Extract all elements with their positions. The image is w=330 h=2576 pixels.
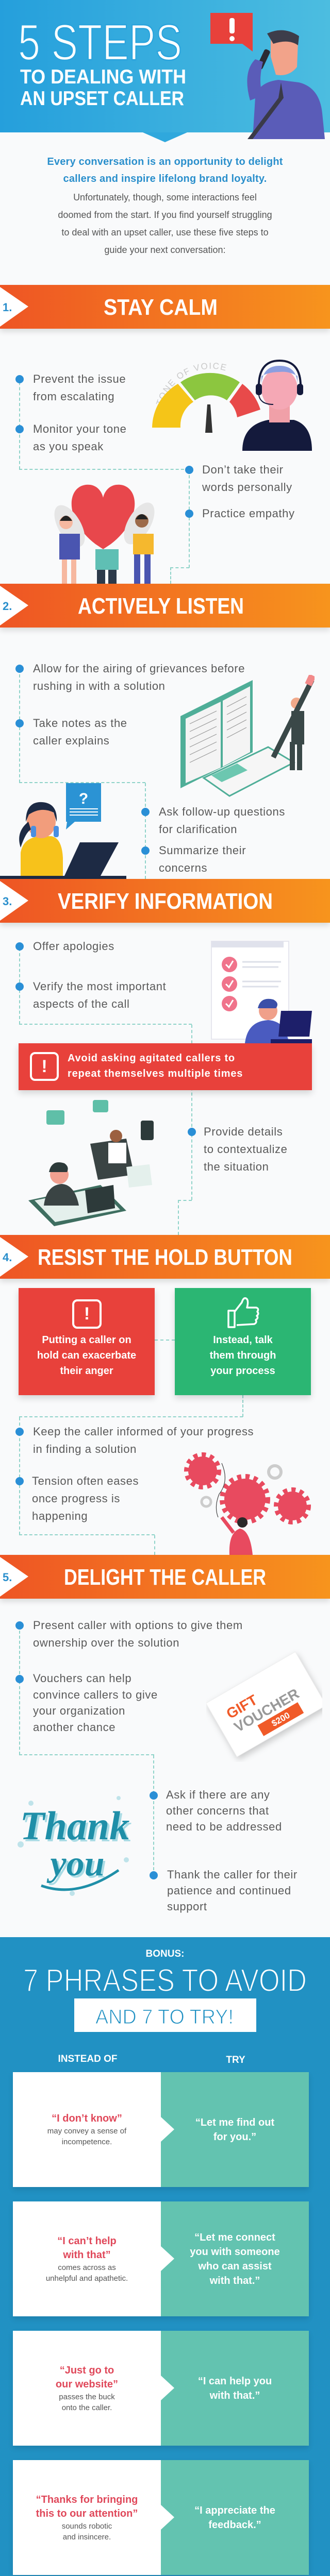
card 4: “Thanks for bringing <box>36 2494 138 2505</box>
card 4: this to our attention” <box>36 2508 138 2519</box>
card 1 <box>13 2072 309 2187</box>
bonus heading <box>23 1948 307 2032</box>
step bar 5: delight the caller <box>0 1555 330 1599</box>
step 2 bullets <box>15 662 285 879</box>
step bar 3: verify information <box>0 879 330 923</box>
icon: thank you lettering <box>18 1796 131 1896</box>
panel: bonus phrases: TRY <box>226 2055 245 2065</box>
icon: notebook with writer <box>180 675 315 797</box>
step bar 3: verify information: 3. <box>3 895 12 908</box>
step 3 bullets <box>15 940 287 1235</box>
bullet: thank the caller: support <box>167 1900 207 1913</box>
card 3: “I can help you <box>198 2375 272 2386</box>
intro text: doomed from the start. If you find yourself struggling <box>58 210 272 220</box>
bullet: don't take personally: words personally <box>202 481 292 494</box>
bullet: vouchers: convince callers to give <box>33 1688 158 1701</box>
icon: tone of voice gauge with agent <box>152 360 312 451</box>
card 3 <box>13 2331 309 2446</box>
icon: people holding heart <box>55 484 155 584</box>
bullet: prevent escalation: from escalating <box>33 390 114 403</box>
card 2: you with someone <box>190 2246 280 2258</box>
card 2 <box>13 2201 309 2316</box>
card 2: comes across as <box>58 2263 116 2272</box>
icon: gift voucher card: GIFT <box>224 1691 260 1722</box>
bullet: other concerns: Ask if there are any <box>166 1788 270 1801</box>
panel: talk through (green): Instead, talk <box>213 1334 273 1346</box>
bullet: don't take personally <box>185 463 292 494</box>
bullet: keep caller informed: Keep the caller informed of your progress <box>33 1425 254 1438</box>
panel: hold warning (red): hold can exacerbate <box>37 1350 136 1361</box>
bullet: allow grievances <box>15 662 245 692</box>
icon: gift voucher card <box>206 1652 322 1761</box>
bullet: follow-up questions: for clarification <box>159 823 237 836</box>
card 2: with that” <box>63 2249 111 2261</box>
bullet: summarize <box>141 844 246 874</box>
bullet: provide details: the situation <box>204 1160 269 1173</box>
bullet: take notes: Take notes as the <box>33 717 127 730</box>
bullet: provide details <box>188 1125 287 1173</box>
icon: alert square: ! <box>84 1304 90 1324</box>
card 4: sounds robotic <box>62 2521 112 2531</box>
bullet: keep caller informed: in finding a solution <box>33 1443 137 1455</box>
step bar 2: actively listen: ACTIVELY LISTEN <box>78 594 244 619</box>
icon: tone of voice gauge with agent: TONE OF VOICE <box>156 363 226 404</box>
icon: alert square <box>72 1299 102 1329</box>
intro text: Unfortunately, though, some interactions feel <box>73 192 257 202</box>
bullet: don't take personally: Don’t take their <box>202 463 284 476</box>
icon: gift voucher card: $200 <box>270 1710 292 1728</box>
bullet: prevent escalation <box>15 372 126 403</box>
step bar 4: resist the hold button: 4. <box>3 1251 12 1264</box>
card 1: incompetence. <box>62 2138 112 2146</box>
bullet: summarize: Summarize their <box>159 844 246 857</box>
card 2: “I can’t help <box>57 2235 117 2246</box>
intro text: guide your next conversation: <box>104 245 226 255</box>
bullet: verify aspects <box>15 980 166 1010</box>
bonus heading: BONUS: <box>146 1948 184 1959</box>
bullet: prevent escalation: Prevent the issue <box>33 372 126 385</box>
bullet: provide details: to contextualize <box>204 1143 287 1156</box>
dashed connectors step 5 <box>19 1631 20 1755</box>
card 3: passes the buck <box>59 2393 115 2401</box>
step bar 1: stay calm <box>0 285 330 329</box>
panel: hold warning (red) <box>19 1288 155 1395</box>
step bar 2: actively listen <box>0 584 330 628</box>
callout: avoid repeating <box>19 1043 312 1090</box>
card 1: for you.” <box>213 2131 256 2142</box>
card 2: unhelpful and apathetic. <box>46 2274 128 2282</box>
header banner <box>0 0 330 142</box>
bullet: present options: Present caller with options to give them <box>33 1619 243 1632</box>
step 1 bullets <box>15 372 295 584</box>
bullet: tension eases: Tension often eases <box>32 1475 139 1487</box>
bullet: allow grievances: rushing in with a solution <box>33 680 166 692</box>
bullet: tension eases <box>15 1475 139 1522</box>
panel: hold warning (red): their anger <box>60 1365 113 1377</box>
icon: checklist with agent <box>211 941 312 1043</box>
bullet: thank the caller: Thank the caller for their <box>167 1868 298 1881</box>
column headers: INSTEAD OF <box>58 2054 118 2064</box>
card 1: may convey a sense of <box>47 2127 126 2136</box>
step bar 1: stay calm: STAY CALM <box>104 295 218 320</box>
step bar 1: stay calm: 1. <box>3 301 12 314</box>
bullet: tension eases: once progress is <box>32 1492 120 1505</box>
bullet: practice empathy: Practice empathy <box>202 507 295 520</box>
bullet: thank the caller <box>150 1868 298 1913</box>
bullet: vouchers: another chance <box>33 1721 116 1733</box>
card 4 <box>13 2460 309 2575</box>
icon: gears with woman <box>184 1452 311 1555</box>
bullet: verify aspects: aspects of the call <box>33 997 130 1010</box>
bullet: monitor tone <box>15 422 126 453</box>
card 2: who can assist <box>198 2261 272 2272</box>
bullet: present options: ownership over the solution <box>33 1636 179 1649</box>
panel: talk through (green): your process <box>210 1365 275 1377</box>
bullet: take notes: caller explains <box>33 734 109 747</box>
card 4: and insincere. <box>63 2533 111 2541</box>
bullet: take notes <box>15 717 127 747</box>
card 3: onto the caller. <box>62 2403 112 2412</box>
intro text <box>47 156 283 255</box>
intro text: callers and inspire lifelong brand loyalty. <box>63 173 267 184</box>
callout: avoid repeating: repeat themselves multiple times <box>68 1068 243 1079</box>
bullet: summarize: concerns <box>159 861 207 874</box>
panel: bonus phrases <box>0 1937 330 2576</box>
step bar 5: delight the caller: 5. <box>3 1571 12 1584</box>
bullet: offer apologies: Offer apologies <box>33 940 114 953</box>
dashed connectors step 4 <box>155 1340 175 1341</box>
card 2: with that.” <box>210 2275 260 2286</box>
icon: thumbs up <box>227 1297 259 1328</box>
bullet: verify aspects: Verify the most important <box>33 980 166 993</box>
panel: hold warning (red): Putting a caller on <box>42 1334 131 1346</box>
icon: agent with laptop and question bubble <box>0 783 126 879</box>
step bar 5: delight the caller: DELIGHT THE CALLER <box>64 1565 266 1590</box>
bullet: allow grievances: Allow for the airing of grievances before <box>33 662 245 675</box>
card 3: “Just go to <box>60 2365 114 2376</box>
icon: thank you lettering: Thank <box>20 1803 129 1848</box>
bullet: other concerns <box>150 1788 282 1833</box>
intro text: to deal with an upset caller, use these five steps to <box>61 227 269 238</box>
card 4: “I appreciate the <box>194 2505 275 2516</box>
bullet: present options <box>15 1619 243 1649</box>
icon: isometric call scene <box>28 1100 154 1226</box>
bullet: follow-up questions <box>141 805 285 836</box>
card 1: “Let me find out <box>195 2116 274 2128</box>
title <box>18 15 186 108</box>
bullet: monitor tone: Monitor your tone <box>33 422 126 435</box>
panel: talk through (green) <box>175 1288 311 1395</box>
icon: gift voucher card: VOUCHER <box>232 1685 302 1735</box>
bullet: monitor tone: as you speak <box>33 440 104 453</box>
icon: alert square: ! <box>41 1057 47 1076</box>
step bar 3: verify information: VERIFY INFORMATION <box>58 889 273 914</box>
bonus heading: AND 7 TO TRY! <box>95 2006 234 2028</box>
callout: avoid repeating: Avoid asking agitated callers to <box>68 1053 235 1064</box>
bullet: other concerns: other concerns that <box>166 1804 269 1817</box>
panel: talk through (green): them through <box>210 1350 276 1361</box>
bullet: provide details: Provide details <box>204 1125 283 1138</box>
card 3: with that.” <box>210 2389 260 2401</box>
card 1: “I don’t know” <box>52 2113 122 2124</box>
step bar 4: resist the hold button <box>0 1235 330 1279</box>
bullet: other concerns: need to be addressed <box>166 1820 282 1833</box>
icon: alert square <box>30 1052 59 1081</box>
intro text: Every conversation is an opportunity to delight <box>47 156 283 167</box>
card 3: our website” <box>56 2378 118 2389</box>
bullet: follow-up questions: Ask follow-up questions <box>159 805 285 818</box>
icon: thank you lettering: you <box>48 1846 106 1886</box>
card 2: “Let me connect <box>194 2232 275 2243</box>
icon: thank you lettering: Thank <box>22 1805 131 1850</box>
bullet: vouchers: your organization <box>33 1704 125 1717</box>
icon: thank you lettering: you <box>46 1844 104 1884</box>
card 4: feedback.” <box>208 2519 261 2531</box>
icon: man on phone with alert bubble <box>210 13 325 139</box>
bullet: vouchers: Vouchers can help <box>33 1672 131 1685</box>
bullet: vouchers <box>15 1672 158 1733</box>
bullet: thank the caller: patience and continued <box>167 1884 291 1897</box>
bullet: tension eases: happening <box>32 1510 88 1522</box>
step bar 2: actively listen: 2. <box>3 600 12 613</box>
bullet: keep caller informed <box>15 1425 254 1455</box>
icon: agent with laptop and question bubble: ? <box>79 790 88 807</box>
